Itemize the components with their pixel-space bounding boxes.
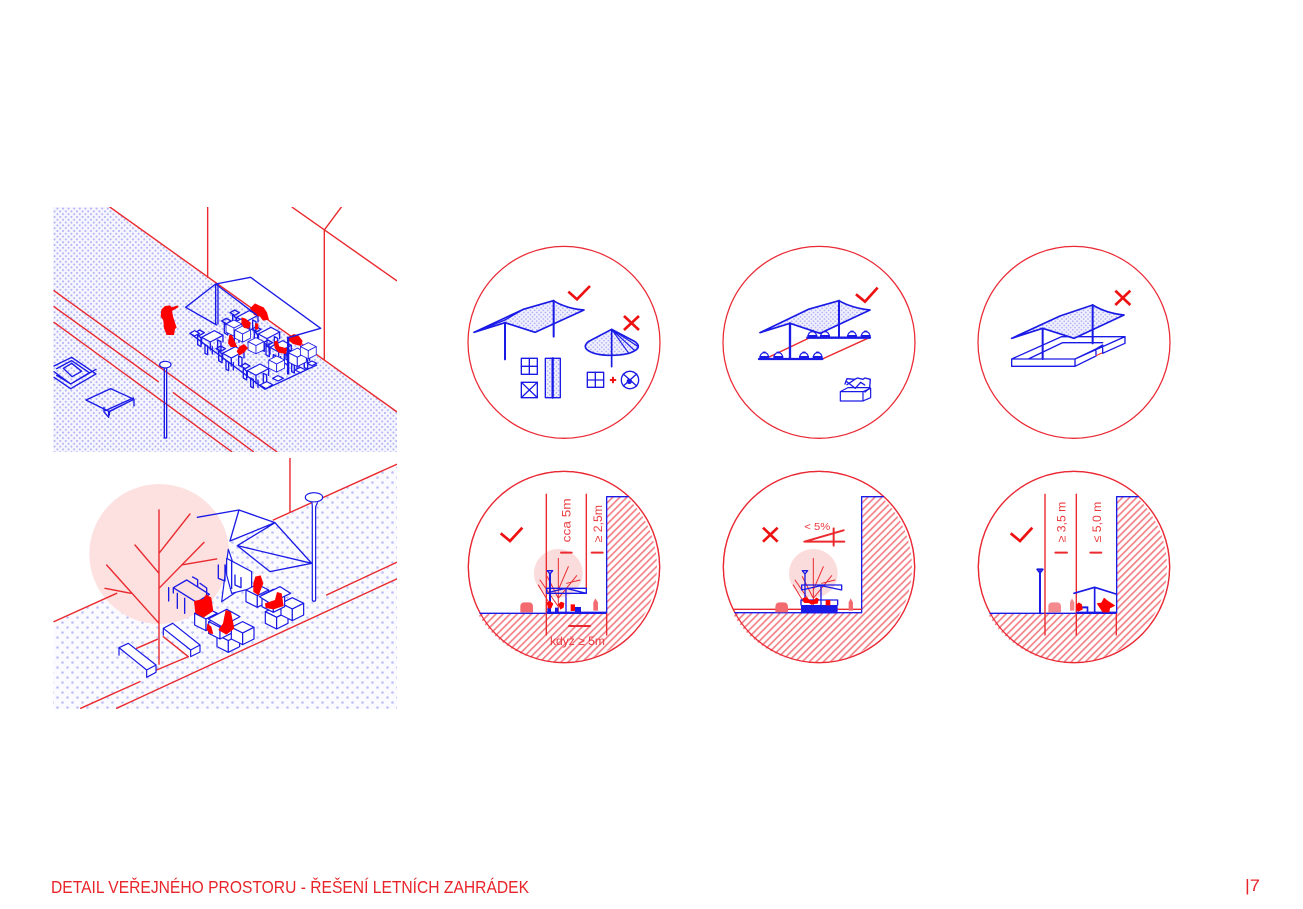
dimension: at least 3,5 m: ≥ 3,5 m <box>1055 502 1068 542</box>
panel: bottom isometric street view <box>53 458 397 709</box>
tree <box>534 549 583 612</box>
deck with furniture <box>801 571 842 613</box>
cross mark <box>624 316 639 330</box>
dimension: at most 5,0 m: ≤ 5,0 m <box>1091 502 1104 542</box>
circle: section on raised deck <box>722 470 916 664</box>
canopy <box>1012 305 1124 359</box>
check mark <box>1011 528 1032 541</box>
ground and wall outline <box>735 497 883 613</box>
tables and chairs <box>169 558 304 652</box>
slope symbol <box>804 528 844 546</box>
hatched ground and wall <box>989 497 1167 662</box>
dimension: cca 5m: cca 5m <box>560 498 573 542</box>
check mark <box>568 286 590 299</box>
canopy plans <box>521 358 560 398</box>
dashes <box>561 553 603 626</box>
canopy <box>760 301 870 359</box>
umbrella <box>585 329 638 367</box>
platform <box>1012 337 1125 366</box>
canopy outline <box>186 277 321 374</box>
slope label: < 5% <box>804 522 831 533</box>
street lamp <box>305 493 323 601</box>
circle: canopy on enclosed platform <box>978 246 1170 438</box>
terrace furniture <box>190 310 317 389</box>
dashes <box>1055 550 1101 556</box>
footer title: DETAIL VEŘEJNÉHO PROSTORU - ŘEŠENÍ LETNÍCH ZAHRÁDEK <box>51 876 529 897</box>
street lamp <box>1037 569 1043 613</box>
canopy <box>474 301 584 359</box>
dimension lines <box>1045 494 1116 635</box>
street lamp <box>160 361 171 438</box>
cross mark <box>763 528 778 542</box>
seated people <box>194 575 284 635</box>
hatched ground and wall <box>479 497 657 662</box>
circle: canopy with furniture <box>723 246 915 438</box>
benches <box>119 623 200 677</box>
red street lines <box>54 458 397 708</box>
tree branches <box>105 510 217 664</box>
planter and small tree <box>520 598 598 612</box>
ground and wall outline <box>480 497 628 613</box>
bench <box>86 389 134 417</box>
furniture rows <box>759 331 871 359</box>
planter and small tree <box>775 598 853 612</box>
dimension: at least 2,5m: ≥ 2,5m <box>592 505 605 542</box>
check mark <box>856 288 878 302</box>
ground and wall outline <box>990 497 1138 613</box>
check mark <box>501 528 522 541</box>
seated people <box>228 303 303 355</box>
circle: canopy type versus umbrella <box>468 246 660 438</box>
lamp and furniture <box>546 571 607 613</box>
planter <box>840 378 871 401</box>
canopy and furniture <box>1074 587 1116 613</box>
dimension: když at least 5m: když ≥ 5m <box>550 635 605 648</box>
page number: |7 <box>1245 876 1260 895</box>
person silhouette <box>161 305 179 335</box>
panel: top isometric street view <box>53 207 397 452</box>
red floor edges <box>770 337 870 359</box>
cross mark <box>1115 291 1130 305</box>
circle: section with lamp and sidewalk widths <box>978 470 1170 664</box>
dotted pavement <box>53 207 397 452</box>
circle: section with tree, 5 m <box>468 470 660 664</box>
tree <box>789 549 838 612</box>
dotted pavement <box>53 464 397 709</box>
umbrella plans <box>587 371 639 389</box>
red street and building lines <box>54 207 397 452</box>
planter and small tree <box>1048 598 1074 612</box>
canopy <box>197 510 312 602</box>
dimension lines <box>546 494 607 635</box>
stacked platform <box>54 357 96 389</box>
hatched ground and wall <box>734 497 912 662</box>
tree crown <box>89 484 229 624</box>
